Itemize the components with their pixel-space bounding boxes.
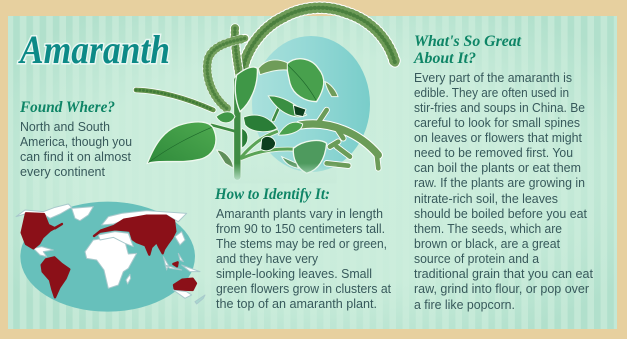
text block: what's so great about it: can boil the plants or eat them	[414, 160, 581, 175]
title: Amaranth	[17, 27, 170, 72]
spike: short upright flower	[235, 28, 241, 82]
leaf: center upright	[235, 67, 257, 112]
leaf: large left	[147, 122, 216, 163]
heading: found where: Found Where?	[19, 99, 115, 116]
text block: what's so great about it: need to be removed first. You	[414, 145, 573, 160]
text block: what's so great about it	[414, 70, 593, 312]
heading: how to identify it: How to Identify It:	[214, 186, 330, 203]
spike: large drooping flower	[242, 8, 395, 80]
text block: how to identify it: from 90 to 150 centimeters tall.	[216, 221, 385, 236]
text block: what's so great about it: edible. They are often used in	[414, 85, 569, 100]
stem base fade	[220, 163, 337, 183]
text block: what's so great about it: nitrate-rich soil, the leaves	[414, 191, 558, 206]
text block: what's so great about it: them. The seeds, which are	[414, 221, 562, 236]
text block: how to identify it: The stems may be red or green,	[216, 236, 387, 251]
text block: what's so great about it: careful to look for small spines	[414, 115, 580, 130]
heading: what's so great about it: About It?	[413, 50, 476, 67]
text block: how to identify it: and they have very	[216, 251, 318, 266]
text block: what's so great about it: source of protein and a	[414, 251, 540, 266]
leaf: middle cluster	[216, 96, 307, 168]
text block: what's so great about it: raw, grind into flour, or pop over	[414, 281, 590, 296]
text block: found where: America, though you	[20, 134, 132, 149]
text block: what's so great about it: Every part of the amaranth is	[414, 70, 572, 85]
map: white landmasses	[16, 204, 205, 304]
heading: what's so great about it: What's So Great	[414, 33, 522, 50]
heading: what's so great about it	[413, 33, 522, 67]
leaf: lower right	[293, 141, 327, 173]
text block: how to identify it: simple-looking leaves. Small	[216, 266, 372, 281]
text block: what's so great about it: brown or black, are a great	[414, 236, 560, 251]
text block: how to identify it: Amaranth plants vary in length	[216, 206, 383, 221]
illustration: amaranth plant	[136, 8, 395, 183]
text block: how to identify it	[216, 206, 391, 311]
text block: how to identify it: green flowers grow in clusters at	[216, 281, 391, 296]
text block: what's so great about it: should be boiled before you eat	[414, 206, 587, 221]
map: red regions where amaranth grows	[22, 213, 196, 297]
teal circle behind plant	[252, 36, 370, 172]
text block: found where: every continent	[20, 164, 105, 179]
text block: what's so great about it: a fire like popcorn.	[414, 297, 515, 312]
text block: what's so great about it: raw. If the plants are growing in	[414, 175, 585, 190]
map: teal ellipse	[20, 202, 195, 312]
world map	[16, 202, 205, 312]
spike: lower right flower	[300, 110, 378, 168]
text block: how to identify it: the top of an amaranth plant.	[216, 296, 377, 311]
text block: found where: can find it on almost	[20, 149, 131, 164]
text block: found where: North and South	[20, 119, 110, 134]
text block: what's so great about it: traditional grain that you can eat	[414, 266, 593, 281]
leaf: upper right	[258, 59, 338, 102]
stems	[212, 80, 297, 177]
spike: lower left flower	[136, 90, 213, 110]
spike: curved left flower	[207, 38, 245, 108]
text block: what's so great about it: on leaves or flowers that might	[414, 130, 582, 145]
text block: found where	[20, 119, 132, 179]
text block: what's so great about it: stir-fries and soups in China. Be	[414, 100, 585, 115]
